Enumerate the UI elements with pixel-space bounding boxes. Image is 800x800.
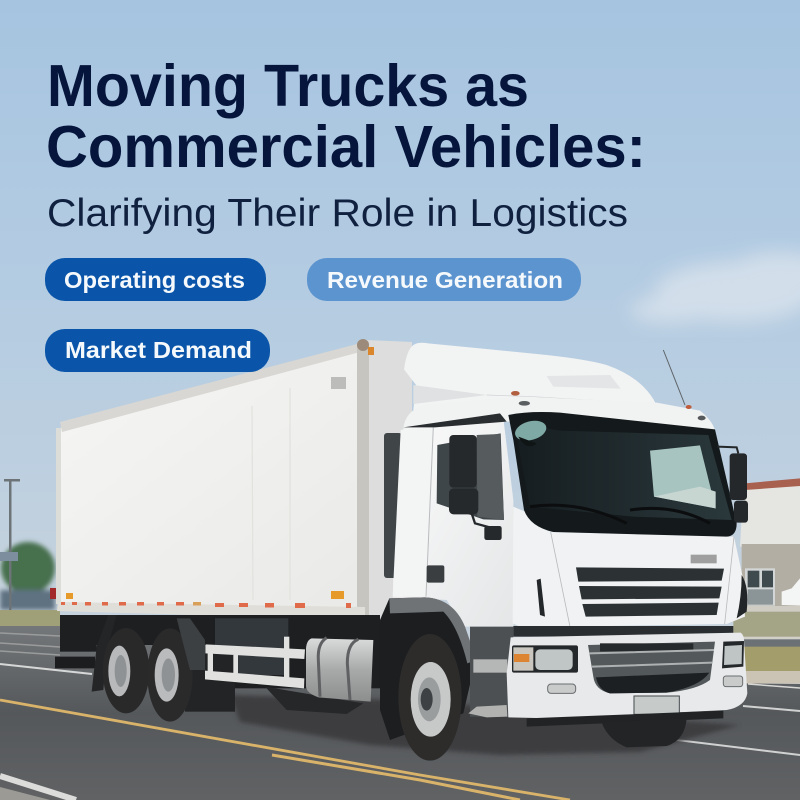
wheel arch [380,597,473,740]
box reflector strip [50,588,351,608]
cloud [630,252,800,323]
road markings [0,633,800,800]
subtitle: Clarifying Their Role in Logistics [47,192,628,235]
pill: market demand: Market Demand [65,337,252,363]
cab roof [403,397,715,435]
front right wheel [602,718,687,747]
lower grille [588,642,715,693]
title: Commercial Vehicles: [46,114,646,180]
cab side door [393,418,514,627]
truck shadow [230,695,740,755]
headlight left [512,645,578,673]
pill: revenue generation [307,258,581,301]
antenna [663,350,685,405]
truck [50,339,748,761]
deflector [404,343,657,410]
door handle [427,565,444,583]
cab marker lights [511,391,706,420]
rear wheel 2 [147,618,235,722]
cargo box [56,339,412,622]
fuel tank [306,638,373,702]
side window [437,433,504,520]
mirror [449,435,502,540]
background trees and pole [0,479,55,610]
badge [691,555,717,563]
right mirror [717,447,748,523]
headlight right [722,641,744,668]
under bumper shadow [527,711,723,727]
windshield [508,412,737,537]
cab [380,350,748,761]
chassis and rear wheels [55,615,380,722]
front left wheel [398,634,462,761]
pill: revenue generation: Revenue Generation [327,267,563,293]
lower cab band [513,626,733,637]
background building [740,478,800,612]
road surface [0,626,800,800]
title [46,53,646,180]
pill: operating costs [45,258,266,301]
front face [513,507,745,627]
roadside grass right [733,612,800,684]
fog lights [548,676,743,693]
pill: market demand [45,329,270,372]
side guard rails [205,637,305,688]
pill: operating costs: Operating costs [64,267,245,293]
bumper [507,633,747,718]
licence plate [634,696,679,714]
roadside grass left [0,610,60,628]
rear wheel 1 [103,628,149,713]
title: Moving Trucks as [47,53,529,119]
grille [576,567,724,617]
